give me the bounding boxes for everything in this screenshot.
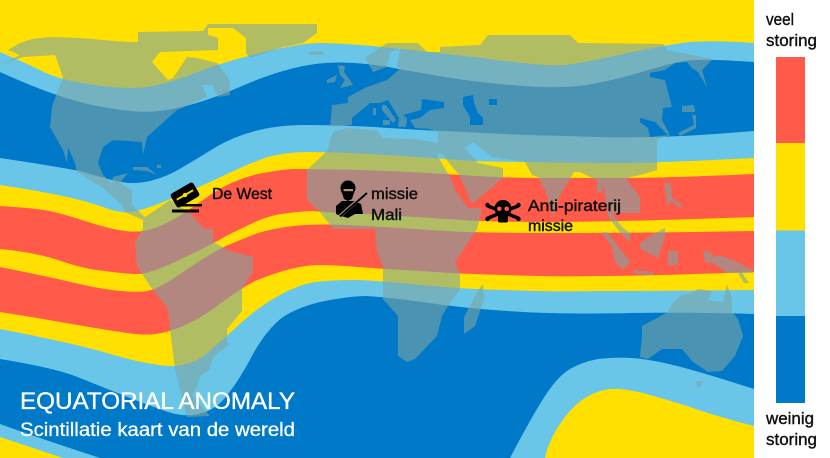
- band: southern dark blue: [0, 296, 754, 458]
- legend label: weinig storing: [765, 409, 817, 449]
- legend label: veel storing: [766, 10, 817, 50]
- band: bottom-right yellow: [545, 389, 754, 458]
- legend: [765, 10, 817, 449]
- band: second light blue: [0, 125, 754, 458]
- subtitle: Scintillatie kaart van de wereld: [20, 419, 295, 441]
- band: bottom-left light blue corner: [0, 424, 100, 458]
- label: missie Mali: [371, 186, 418, 224]
- band: southern light blue: [0, 280, 754, 458]
- icon: soldier with rifle: [336, 180, 367, 218]
- band: southern red crest: [0, 224, 754, 458]
- band: bottom-left yellow corner: [0, 437, 63, 458]
- label: De West: De West: [212, 186, 273, 203]
- icon: razor blade (De West): [170, 182, 202, 212]
- legend label: veel storing: storing: [766, 31, 817, 50]
- band: middle yellow: [0, 211, 754, 458]
- band: upper dark blue: [0, 60, 754, 458]
- legend label: weinig storing: weinig: [765, 409, 814, 428]
- band: northern red crest: [0, 169, 754, 458]
- label: Anti-piraterij missie: missie: [528, 218, 573, 235]
- band: bottom-right light blue: [510, 358, 754, 458]
- label: Anti-piraterij missie: [528, 198, 621, 235]
- legend label: weinig storing: storing: [766, 430, 817, 449]
- label: missie Mali: Mali: [371, 207, 402, 224]
- icon: skull and crossbones: [485, 200, 521, 222]
- legend label: veel storing: veel: [766, 10, 794, 29]
- band: southern yellow: [0, 265, 754, 458]
- legend bar: colour scale: [776, 57, 805, 403]
- band: northern yellow: [0, 152, 754, 458]
- world map land overlay: [0, 24, 753, 417]
- label: Anti-piraterij missie: Anti-piraterij: [528, 198, 621, 215]
- label: missie Mali: missie: [371, 186, 418, 203]
- title: EQUATORIAL ANOMALY: [20, 388, 295, 415]
